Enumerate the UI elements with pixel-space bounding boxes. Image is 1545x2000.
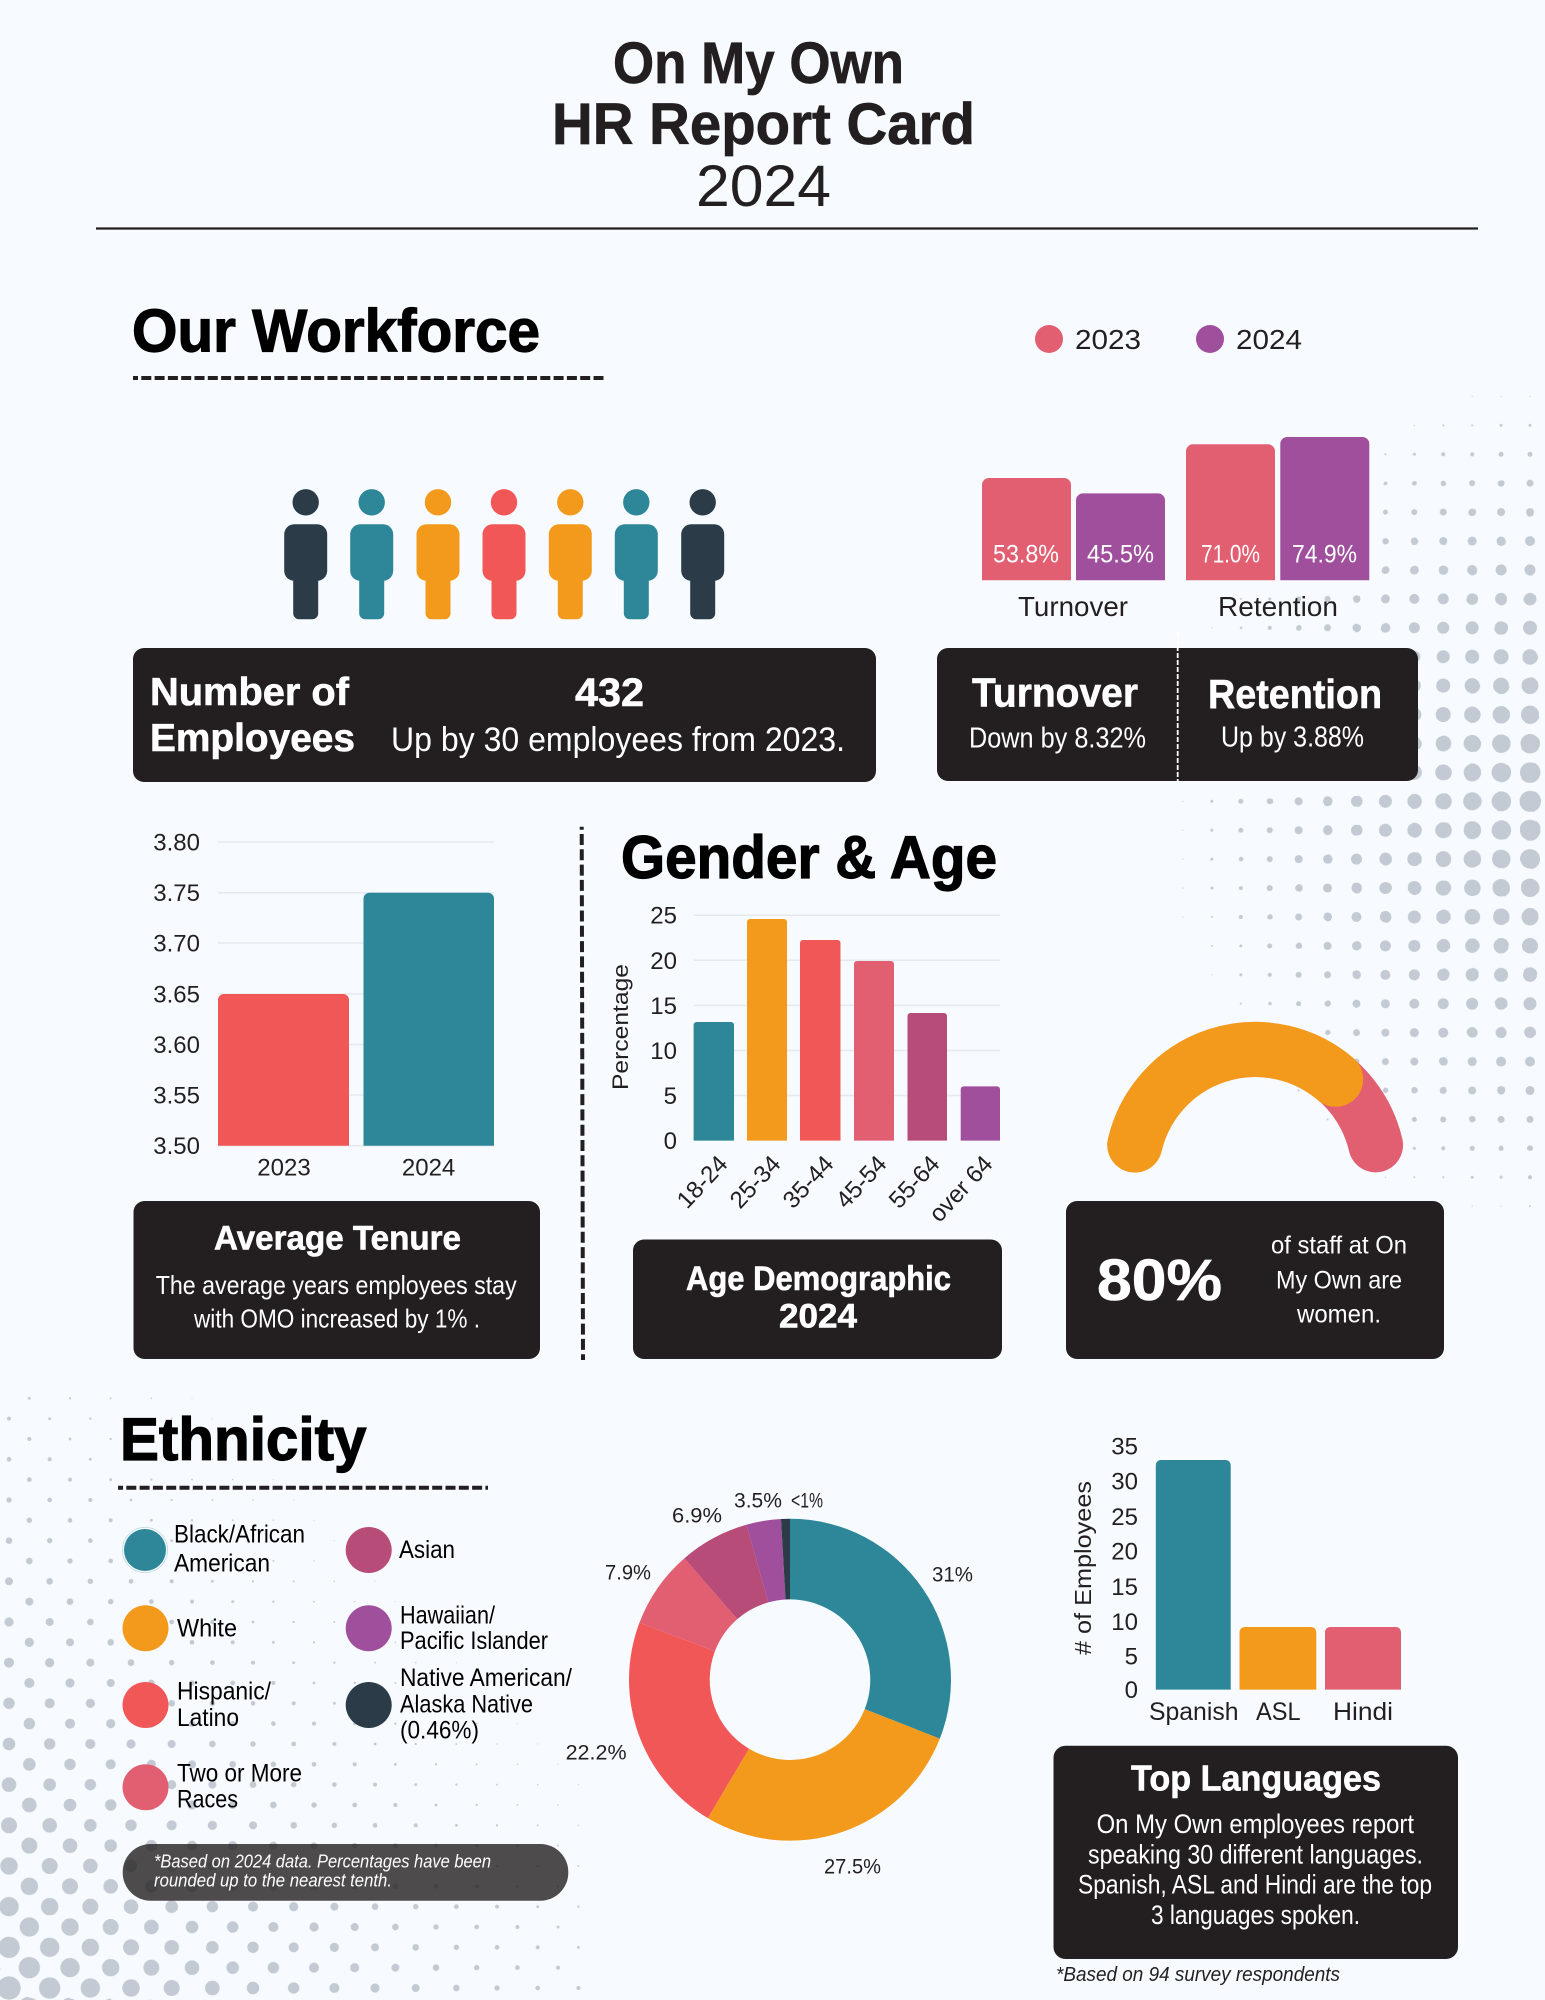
- legend: ethnicity: (0.46%): [400, 1716, 479, 1744]
- donut chart: ethnicity: 22.2%: [566, 1742, 627, 1765]
- donut chart: ethnicity: 31%: [932, 1564, 973, 1587]
- bar chart: average tenure: 3.50: [153, 1133, 200, 1160]
- legend: ethnicity: Asian: [399, 1536, 455, 1564]
- bar chart: average tenure: 3.60: [153, 1032, 200, 1059]
- bar chart: average tenure: 3.75: [153, 880, 200, 907]
- bar chart: turnover and retention: 74.9%: [1292, 541, 1357, 569]
- panel: 80 percent of staff: My Own are: [1276, 1266, 1402, 1294]
- bar chart: top languages: [1070, 1434, 1401, 1726]
- panel: 80 percent of staff: [1066, 1201, 1444, 1359]
- bar chart: turnover and retention: 53.8%: [993, 541, 1059, 569]
- legend: years: 2024: [1236, 324, 1302, 355]
- bar chart: age demographic: 25-34: [725, 1151, 786, 1214]
- panel: number of employees: Employees: [150, 717, 355, 760]
- bar chart: age demographic: 35-44: [778, 1151, 839, 1214]
- bar chart: turnover and retention: Turnover: [1018, 591, 1128, 622]
- donut chart: ethnicity: 7.9%: [605, 1562, 651, 1585]
- panel: number of employees: Up by 30 employees from 2023.: [391, 721, 845, 759]
- panel: top languages: Spanish, ASL and Hindi are the top: [1078, 1870, 1432, 1900]
- bar chart: age demographic: 0: [664, 1128, 677, 1155]
- bar chart: age demographic: 55-64: [884, 1151, 945, 1214]
- bar chart: age demographic: 15: [650, 993, 677, 1020]
- panel: turnover and retention change: Up by 3.88%: [1221, 722, 1364, 754]
- bar chart: top languages: 0: [1125, 1677, 1138, 1704]
- bar chart: average tenure: 3.80: [153, 830, 200, 856]
- panel: average tenure: with OMO increased by 1% .: [193, 1304, 480, 1334]
- panel: turnover and retention change: Retention: [1208, 671, 1382, 717]
- panel: number of employees: [133, 648, 876, 782]
- panel: average tenure: [134, 1201, 540, 1359]
- legend: ethnicity: Hispanic/: [177, 1678, 271, 1706]
- bar chart: top languages: Hindi: [1333, 1698, 1393, 1726]
- panel: turnover and retention change: [937, 632, 1418, 781]
- legend: years: [1035, 324, 1302, 355]
- callout: data note: rounded up to the nearest tenth.: [154, 1871, 392, 1891]
- bar chart: age demographic: 18-24: [672, 1151, 733, 1214]
- donut chart: ethnicity: 27.5%: [824, 1856, 881, 1878]
- bar chart: top languages: 5: [1125, 1644, 1138, 1670]
- callout: data note: [123, 1844, 568, 1901]
- panel: 80 percent of staff: of staff at On: [1271, 1232, 1407, 1260]
- bar chart: top languages: 15: [1111, 1574, 1138, 1601]
- heading: Ethnicity: Ethnicity: [120, 1406, 367, 1473]
- panel: 80 percent of staff: women.: [1296, 1300, 1381, 1328]
- legend: ethnicity: [122, 1521, 572, 1814]
- bar chart: average tenure: 3.55: [153, 1082, 200, 1110]
- donut chart: ethnicity: [566, 1489, 973, 1878]
- icon: row of seven people: [284, 489, 724, 619]
- bar chart: age demographic: Percentage: [608, 964, 633, 1090]
- legend: ethnicity: Hawaiian/: [400, 1601, 495, 1629]
- panel: top languages: [1054, 1746, 1458, 1959]
- bar chart: top languages: 20: [1111, 1538, 1138, 1566]
- bar chart: turnover and retention: 45.5%: [1087, 541, 1154, 569]
- panel: age demographic: 2024: [779, 1298, 857, 1336]
- panel: 80 percent of staff: 80%: [1097, 1248, 1222, 1313]
- bar chart: age demographic: 10: [650, 1038, 677, 1065]
- bar chart: top languages: 30: [1111, 1468, 1138, 1496]
- bar chart: turnover and retention: [982, 437, 1369, 622]
- legend: ethnicity: Latino: [177, 1704, 239, 1732]
- bar chart: top languages: ASL: [1256, 1698, 1301, 1726]
- bar chart: turnover and retention: 71.0%: [1201, 541, 1260, 569]
- bar chart: age demographic: 25: [650, 903, 677, 930]
- title: HR Report Card: [552, 92, 975, 157]
- bar chart: average tenure: [153, 830, 494, 1181]
- title: 2024: [696, 154, 831, 219]
- panel: average tenure: Average Tenure: [214, 1220, 461, 1258]
- callout: data note: *Based on 2024 data. Percentages have been: [154, 1851, 491, 1871]
- bar chart: age demographic: 45-54: [831, 1151, 892, 1214]
- panel: age demographic: [633, 1240, 1002, 1359]
- bar chart: top languages: 25: [1111, 1504, 1138, 1531]
- legend: ethnicity: Pacific Islander: [400, 1627, 548, 1655]
- donut chart: ethnicity: 3.5%: [734, 1489, 782, 1512]
- bar chart: average tenure: 2023: [257, 1154, 311, 1181]
- legend: ethnicity: American: [174, 1550, 270, 1578]
- legend: ethnicity: White: [177, 1615, 237, 1643]
- footnote: survey basis: *Based on 94 survey respondents: [1056, 1964, 1340, 1986]
- bar chart: average tenure: 3.65: [153, 982, 200, 1008]
- bar chart: turnover and retention: Retention: [1218, 591, 1338, 622]
- panel: top languages: On My Own employees report: [1097, 1809, 1414, 1839]
- bar chart: top languages: Spanish: [1149, 1698, 1238, 1726]
- bar chart: top languages: 35: [1111, 1434, 1138, 1460]
- title: On My Own: [613, 31, 904, 96]
- legend: ethnicity: Alaska Native: [400, 1691, 533, 1719]
- panel: top languages: 3 languages spoken.: [1151, 1900, 1360, 1930]
- heading: Gender & Age: Gender & Age: [621, 824, 997, 891]
- bar chart: age demographic: over 64: [924, 1151, 998, 1228]
- legend: ethnicity: Black/African: [174, 1521, 305, 1549]
- bar chart: top languages: 10: [1111, 1609, 1138, 1636]
- bar chart: age demographic: 5: [664, 1083, 677, 1110]
- heading: Our Workforce: Our Workforce: [132, 298, 540, 364]
- donut chart: ethnicity: <1%: [791, 1489, 823, 1512]
- bar chart: age demographic: [608, 903, 1000, 1228]
- legend: ethnicity: Two or More: [177, 1760, 302, 1788]
- legend: ethnicity: Races: [177, 1786, 238, 1814]
- legend: ethnicity: Native American/: [400, 1664, 572, 1692]
- panel: average tenure: The average years employees stay: [156, 1270, 517, 1300]
- panel: number of employees: 432: [575, 671, 644, 715]
- panel: age demographic: Age Demographic: [686, 1260, 951, 1298]
- donut chart: ethnicity: 6.9%: [672, 1505, 722, 1528]
- panel: turnover and retention change: Turnover: [972, 670, 1138, 716]
- bar chart: average tenure: 3.70: [153, 930, 200, 958]
- panel: turnover and retention change: Down by 8.32%: [969, 722, 1146, 754]
- bar chart: top languages: # of Employees: [1070, 1481, 1096, 1655]
- legend: years: 2023: [1075, 324, 1141, 355]
- title: [552, 31, 975, 219]
- panel: number of employees: Number of: [150, 671, 350, 714]
- bar chart: average tenure: 2024: [402, 1154, 455, 1181]
- bar chart: age demographic: 20: [650, 948, 677, 975]
- panel: top languages: Top Languages: [1131, 1757, 1381, 1798]
- gauge: 80 percent women: [1135, 1049, 1376, 1145]
- panel: top languages: speaking 30 different languages.: [1088, 1840, 1423, 1870]
